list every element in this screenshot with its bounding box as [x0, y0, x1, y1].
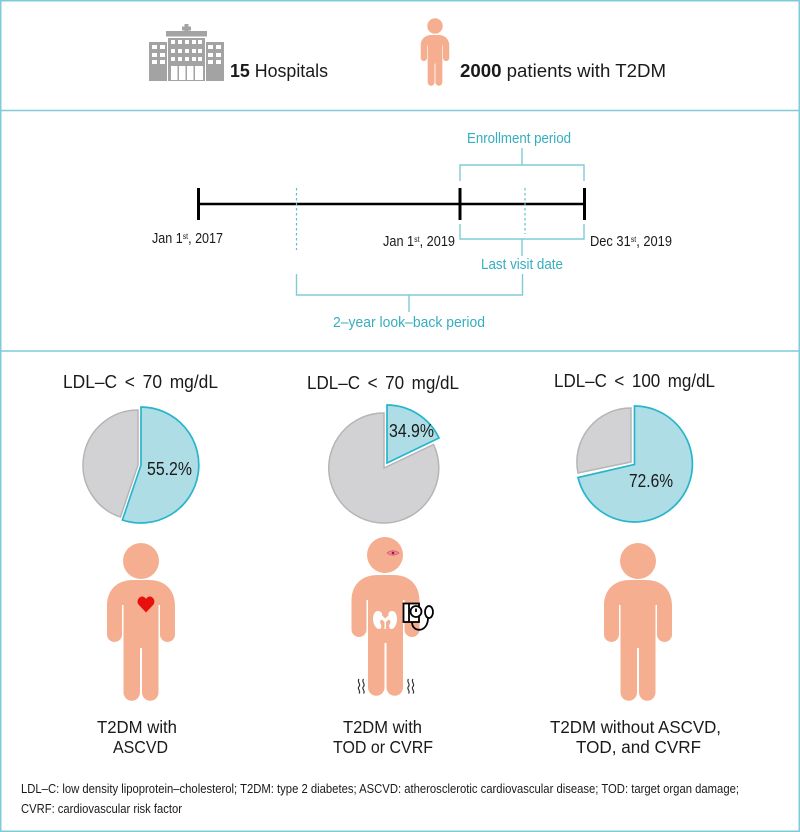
panel: TOD or CVRF group: [307, 373, 459, 757]
date: start 2017: , 2017: [188, 231, 223, 247]
label: enrollment period: Enrollment period: [467, 130, 571, 147]
icon: left foot waves: [358, 679, 364, 694]
icon: person: [604, 543, 672, 701]
label: no risk group: T2DM without ASCVD,: [550, 717, 721, 737]
date: start 2019: Jan 1: [383, 234, 418, 250]
date: start 2019: , 2019: [420, 234, 455, 250]
heading: target: LDL–C < 100 mg/dL: [554, 371, 715, 391]
last visit bracket: [460, 224, 584, 256]
icon: kidneys: [373, 611, 397, 629]
pie chart: 34.9%: [329, 405, 439, 523]
date: end 2019: , 2019: [636, 234, 672, 250]
date: end 2019: st: [631, 235, 637, 244]
heading: target: LDL–C < 70 mg/dL: [307, 373, 459, 393]
date: end 2019: Dec 31: [590, 234, 636, 250]
panel: ASCVD group: [63, 372, 218, 757]
pie chart: 34.9%: 34.9%: [389, 420, 434, 441]
label: last visit date: Last visit date: [481, 256, 563, 273]
icon: hospital: [149, 24, 224, 81]
icon: right foot waves: [408, 679, 414, 694]
date: start 2017: st: [183, 232, 189, 241]
label: TOD or CVRF group: TOD or CVRF: [333, 737, 433, 757]
pie chart: 72.6%: 72.6%: [629, 470, 673, 491]
panel: study timeline: [152, 130, 672, 331]
icon: eye: [387, 551, 399, 555]
label: ASCVD group: [97, 717, 177, 757]
pie chart: 55.2%: 55.2%: [147, 458, 192, 479]
panel: study population: [149, 18, 666, 86]
date: start 2019: st: [414, 235, 420, 244]
pie chart: 55.2%: [83, 407, 199, 523]
text: hospitals count: 15 Hospitals: [230, 60, 328, 81]
label: ASCVD group: ASCVD: [113, 737, 168, 757]
label: no risk group: TOD, and CVRF: [576, 737, 701, 757]
text: patients count: 2000 patients with T2DM: [460, 60, 666, 81]
dashed markers: [296, 188, 525, 250]
label: TOD or CVRF group: [333, 717, 433, 757]
icon: person with organ damage: [352, 537, 433, 696]
timeline axis: [198, 188, 584, 220]
label: TOD or CVRF group: T2DM with: [343, 717, 422, 737]
label: no risk group: [550, 717, 721, 757]
label: ASCVD group: T2DM with: [97, 717, 177, 737]
icon: patient: [421, 18, 449, 86]
footnote: abbreviations: CVRF: cardiovascular risk factor: [21, 801, 183, 816]
date: start 2017: Jan 1: [152, 231, 187, 247]
icon: blood pressure cuff: [404, 604, 433, 630]
look-back bracket: [296, 274, 522, 312]
icon: person with heart: [107, 543, 175, 701]
pie chart: 72.6%: [577, 406, 692, 522]
label: look-back period: 2–year look–back period: [333, 314, 485, 331]
panel: no risk group: [550, 371, 721, 757]
enrollment period bracket: [460, 148, 584, 181]
icon: heart: [138, 597, 154, 612]
heading: target: LDL–C < 70 mg/dL: [63, 372, 218, 392]
footnote: abbreviations: [21, 781, 739, 816]
